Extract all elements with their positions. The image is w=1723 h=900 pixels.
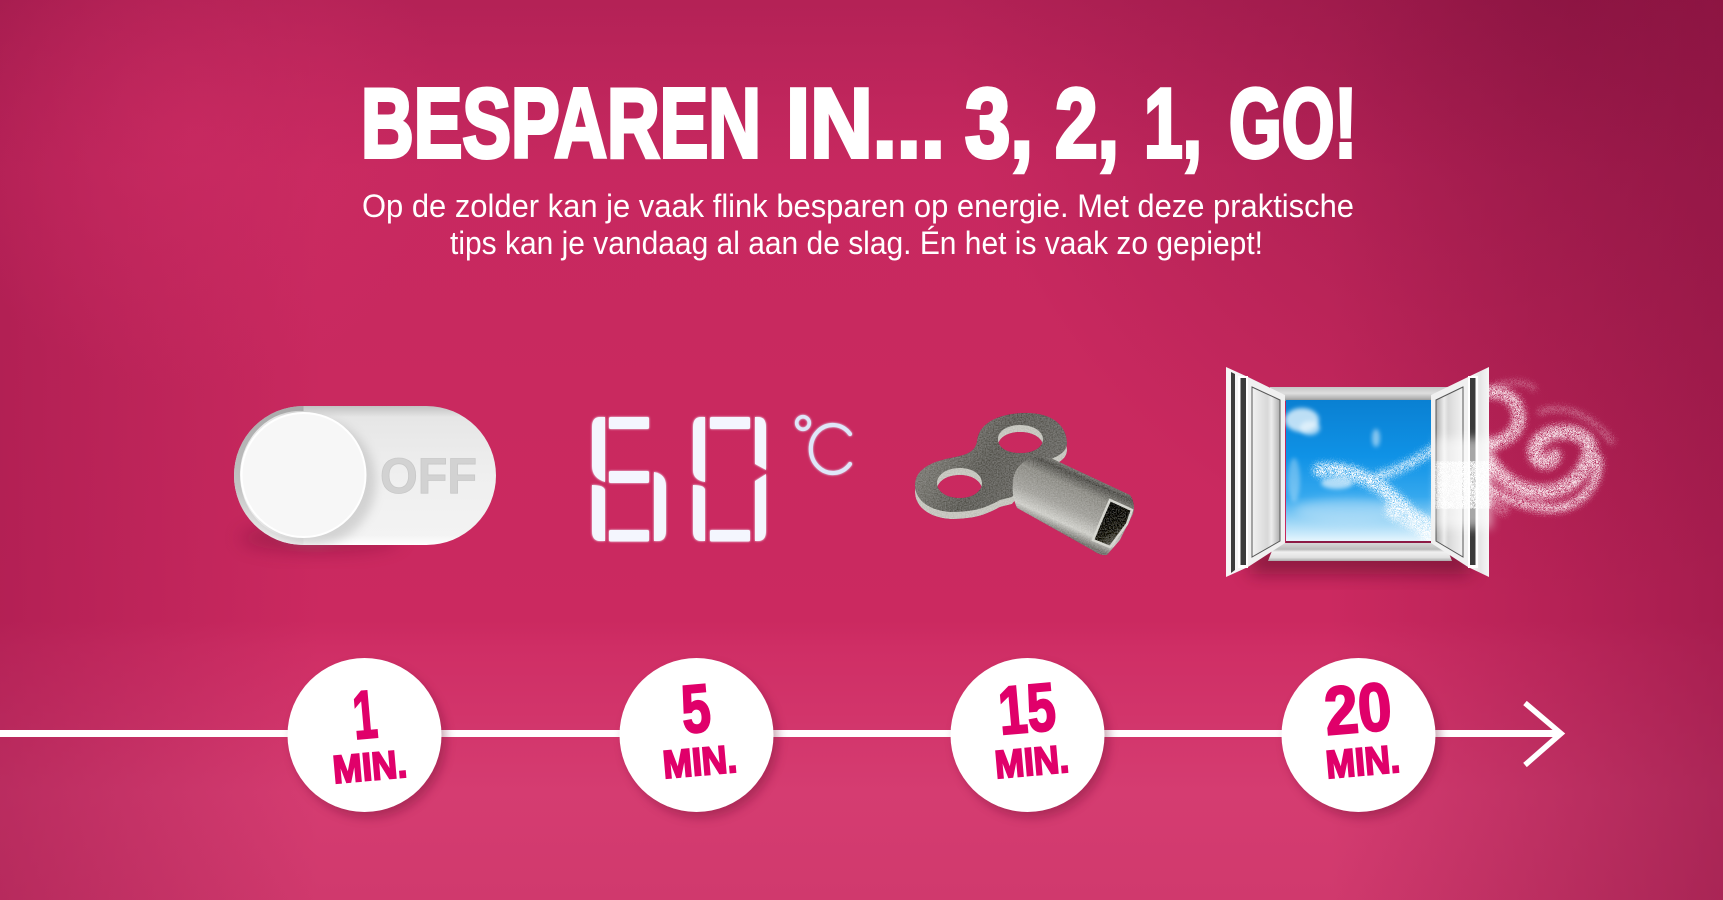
step 15 minutes xyxy=(950,658,1109,818)
step 15 minutes: MIN. xyxy=(993,738,1071,787)
letter C xyxy=(811,425,850,473)
title: GO! xyxy=(1229,68,1357,178)
step 5 minutes: 5 xyxy=(678,670,714,748)
right shutter xyxy=(1431,367,1489,577)
top of frame xyxy=(1270,387,1448,401)
left shutter xyxy=(1226,367,1285,577)
title: 1, xyxy=(1144,68,1202,178)
title: IN... xyxy=(786,68,945,178)
step 20 minutes: 20 xyxy=(1321,668,1395,750)
window shadow xyxy=(1250,548,1470,574)
title: 3, xyxy=(965,68,1033,178)
key head underside xyxy=(915,420,1067,519)
digit 6 xyxy=(592,417,666,542)
subtitle: Op de zolder kan je vaak flink besparen op energie. Met deze praktische xyxy=(362,188,1354,224)
step 5 minutes xyxy=(620,658,778,818)
timeline line xyxy=(0,730,1560,737)
sill line under sky xyxy=(1286,541,1436,544)
degree symbol xyxy=(797,417,809,429)
timeline xyxy=(0,658,1561,818)
sky xyxy=(1286,400,1436,542)
icon: radiator key xyxy=(915,413,1134,555)
subtitle xyxy=(362,188,1354,261)
swirl of air xyxy=(1490,383,1612,510)
title: BESPAREN xyxy=(361,68,761,178)
title xyxy=(361,68,1357,178)
step 1 minute: 1 xyxy=(350,676,380,754)
subtitle: tips kan je vandaag al aan de slag. Én het is vaak zo gepiept! xyxy=(450,225,1263,261)
key barrel xyxy=(1013,457,1134,555)
step 20 minutes: MIN. xyxy=(1324,738,1402,787)
step 20 minutes xyxy=(1282,658,1440,818)
icon: off toggle switch xyxy=(234,406,496,552)
clouds and air stream xyxy=(1285,408,1436,538)
key head xyxy=(915,413,1067,512)
digit 0 xyxy=(693,417,766,542)
arrow head xyxy=(1525,703,1561,765)
icon: open window with swirl xyxy=(1226,367,1612,577)
mist over right shutter xyxy=(1436,438,1492,528)
icon: digital display 60 degrees xyxy=(592,417,850,542)
title: 2, xyxy=(1055,68,1119,178)
step 1 minute: MIN. xyxy=(331,743,409,792)
step 15 minutes: 15 xyxy=(995,669,1059,749)
step 5 minutes: MIN. xyxy=(661,738,739,787)
toggle label: OFF xyxy=(380,448,477,504)
key barrel opening xyxy=(1093,500,1132,547)
bottom of frame xyxy=(1268,543,1452,561)
step 1 minute xyxy=(288,658,446,818)
